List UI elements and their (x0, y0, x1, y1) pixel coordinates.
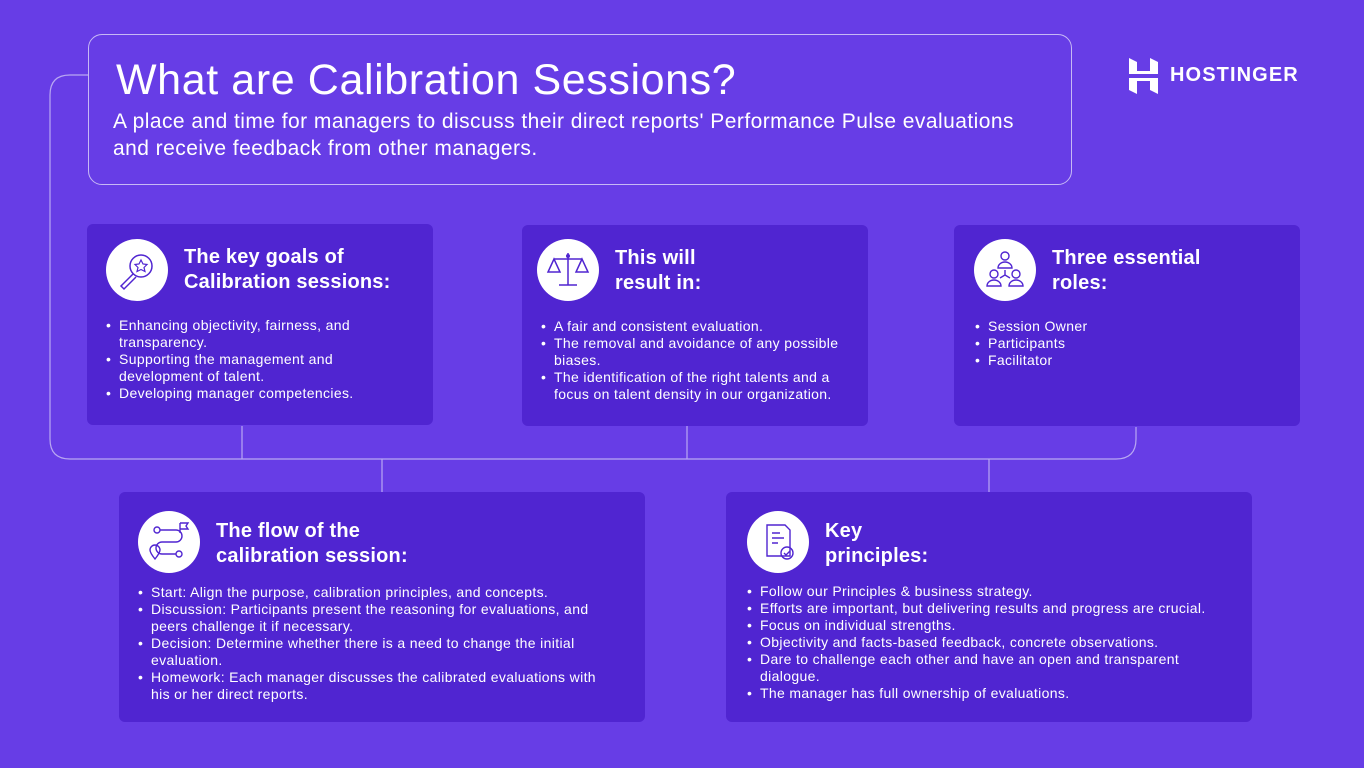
bullets: Homework: Each manager discusses the calibrated evaluations with his or her direct reports. (151, 669, 596, 702)
heading (184, 246, 390, 293)
icon: route (138, 511, 200, 573)
bullets (748, 583, 1206, 701)
panel: key goals (87, 224, 433, 425)
bullets: Supporting the management and development of talent. (119, 351, 333, 384)
heading: The key goals of (184, 246, 344, 268)
icon: scales (537, 239, 599, 301)
heading: Three essential (1052, 247, 1201, 269)
heading (825, 520, 928, 567)
logo (1129, 58, 1299, 94)
bullets (542, 318, 838, 402)
bullets: Enhancing objectivity, fairness, and transparency. (119, 317, 350, 350)
panel: roles (954, 225, 1300, 426)
bullets: Efforts are important, but delivering results and progress are crucial. (760, 600, 1206, 616)
heading: This will (615, 247, 696, 269)
icon: magnifier star (106, 239, 168, 301)
title: What are Calibration Sessions? (116, 56, 736, 104)
bullets: Dare to challenge each other and have an open and transparent dialogue. (760, 651, 1179, 684)
heading: Key (825, 520, 862, 542)
heading: roles: (1052, 272, 1108, 294)
bullets (976, 318, 1087, 368)
panel: principles (726, 492, 1252, 722)
heading: Calibration sessions: (184, 271, 390, 293)
bullets: Facilitator (988, 352, 1053, 368)
heading (615, 247, 701, 294)
bullets: Objectivity and facts-based feedback, concrete observations. (760, 634, 1158, 650)
header box (88, 34, 1072, 185)
heading: calibration session: (216, 545, 408, 567)
bullets: The removal and avoidance of any possible biases. (554, 335, 838, 368)
heading (216, 520, 408, 567)
bullets (106, 317, 354, 401)
bullets: Focus on individual strengths. (760, 617, 956, 633)
bullets: Start: Align the purpose, calibration principles, and concepts. (151, 584, 548, 600)
bullets: Session Owner (988, 318, 1087, 334)
bullets (138, 584, 596, 702)
bullets: Follow our Principles & business strategy. (760, 583, 1033, 599)
bullets: Participants (988, 335, 1065, 351)
bullets: Discussion: Participants present the reasoning for evaluations, and peers challenge it if necessary. (151, 601, 588, 634)
heading: The flow of the (216, 520, 360, 542)
subtitle: A place and time for managers to discuss their direct reports' Performance Pulse evaluations and receive feedback from other managers. (113, 110, 1014, 160)
logo: HOSTINGER (1170, 64, 1299, 86)
heading: principles: (825, 545, 928, 567)
heading (1052, 247, 1201, 294)
icon: people (974, 239, 1036, 301)
bullets: The identification of the right talents and a focus on talent density in our organization. (554, 369, 832, 402)
heading: result in: (615, 272, 701, 294)
panel: flow (119, 492, 645, 722)
icon: document check (747, 511, 809, 573)
bullets: The manager has full ownership of evaluations. (760, 685, 1070, 701)
panel: result (522, 225, 868, 426)
bullets: A fair and consistent evaluation. (554, 318, 763, 334)
bullets: Developing manager competencies. (119, 385, 354, 401)
bullets: Decision: Determine whether there is a need to change the initial evaluation. (151, 635, 575, 668)
